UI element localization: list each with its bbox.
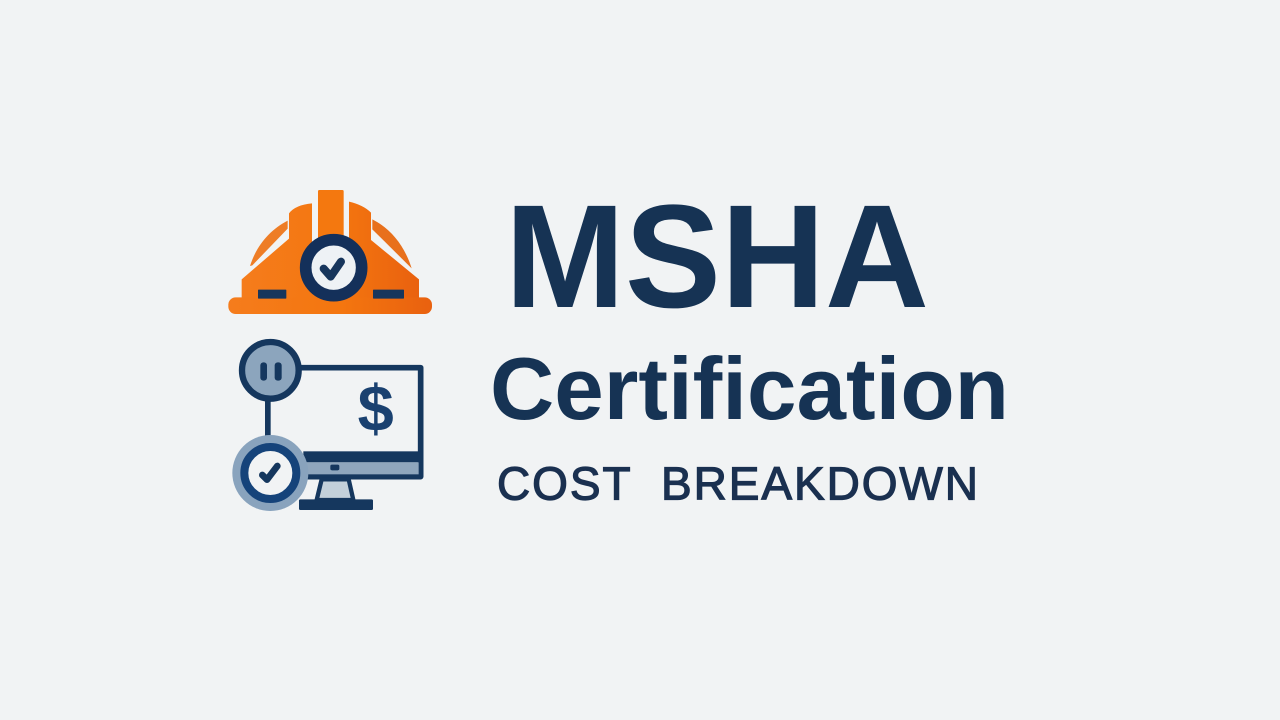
icon: orange hard hat with check badge bbox=[228, 190, 432, 314]
icon: computer monitor with dollar sign and status badges bbox=[232, 342, 422, 511]
subtitle: Certification: Certification bbox=[490, 339, 1009, 438]
title: MSHA: MSHA bbox=[505, 175, 929, 339]
subtitle: cost breakdown: COST BREAKDOWN bbox=[497, 458, 978, 510]
dollar sign: $ bbox=[358, 372, 394, 445]
check badge bbox=[232, 435, 308, 511]
pause badge bbox=[242, 342, 299, 399]
